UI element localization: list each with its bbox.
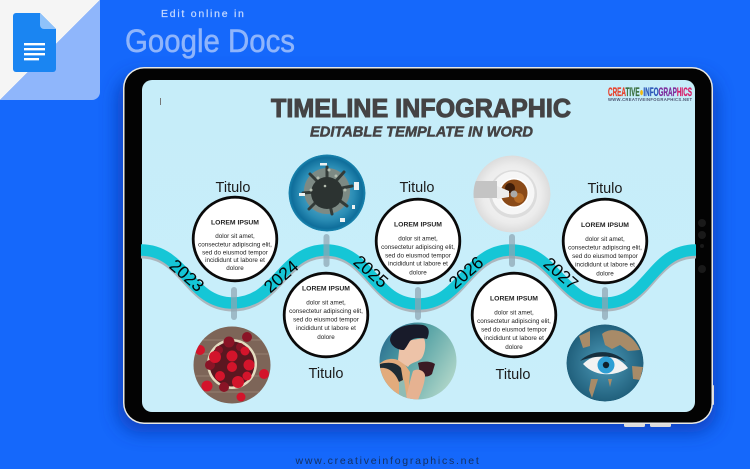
step 2026 text circle: incididunt ut labore et xyxy=(484,335,544,342)
logo: creative infographics: WWW.CREATIVEINFOGRAPHICS.NET xyxy=(608,97,692,102)
step 2027 text circle: incididunt ut labore et xyxy=(575,262,635,268)
step 2024 text circle: incididunt ut labore et xyxy=(296,325,356,332)
step 2024 text circle: dolor sit amet, xyxy=(306,300,346,306)
step 2026 text circle: dolore xyxy=(505,344,523,351)
step 2027 text circle: dolor sit amet, xyxy=(585,236,625,243)
year labels: 2025 xyxy=(350,251,392,292)
wave timeline ribbon xyxy=(141,250,696,307)
step 2023 text circle: consectetur adipiscing elit, xyxy=(198,242,272,248)
photo: eye on earth xyxy=(566,324,644,402)
step 2023 text circle: dolor sit amet, xyxy=(215,233,255,240)
icon: google docs document xyxy=(13,13,56,72)
step headings xyxy=(216,180,622,383)
step headings: Titulo xyxy=(588,181,622,197)
subtitle: EDITABLE TEMPLATE IN WORD xyxy=(310,124,534,140)
step 2026 text circle: sed do eiusmod tempor xyxy=(481,326,547,334)
step 2025 text circle: sed do eiusmod tempor xyxy=(385,252,451,260)
step headings: Titulo xyxy=(496,367,530,383)
step 2027 text circle: LOREM IPSUM xyxy=(581,222,629,229)
title: TIMELINE INFOGRAPHIC xyxy=(271,95,571,123)
step 2025 text circle: dolor sit amet, xyxy=(398,236,438,242)
year labels xyxy=(166,251,582,297)
step 2023 text circle: sed do eiusmod tempor xyxy=(202,250,268,256)
small cursor mark xyxy=(160,98,161,105)
tablet screen xyxy=(142,80,695,412)
step 2023 text circle: incididunt ut labore et xyxy=(205,257,265,264)
photo: woman with cup xyxy=(379,322,457,400)
step 2025 text circle: consectetur adipiscing elit, xyxy=(381,244,455,251)
year labels: 2023 xyxy=(166,255,208,296)
website url: www.creativeinfographics.net xyxy=(295,455,480,467)
step 2025 text circle xyxy=(376,199,460,283)
photo: cherries xyxy=(194,326,270,404)
step 2024 text circle: dolore xyxy=(317,334,335,341)
step 2026 text circle: dolor sit amet, xyxy=(494,310,534,316)
step 2023 text circle: dolore xyxy=(226,265,244,272)
step 2027 text circle xyxy=(563,199,647,283)
photo: dandelion planet xyxy=(288,154,366,232)
tablet xyxy=(118,67,716,432)
step headings: Titulo xyxy=(309,366,343,382)
step 2025 text circle: LOREM IPSUM xyxy=(394,222,442,228)
step 2024 text circle: sed do eiusmod tempor xyxy=(293,316,359,324)
step 2025 text circle: incididunt ut labore et xyxy=(388,260,448,268)
connector bars xyxy=(231,234,608,320)
year labels: 2024 xyxy=(260,256,303,297)
step 2026 text circle: LOREM IPSUM xyxy=(490,296,538,302)
step headings: Titulo xyxy=(400,180,434,196)
google docs wordmark: Google Docs xyxy=(125,23,295,59)
step 2024 text circle: LOREM IPSUM xyxy=(302,286,350,292)
tablet side buttons xyxy=(698,219,706,273)
step 2024 text circle: consectetur adipiscing elit, xyxy=(289,308,363,315)
step headings: Titulo xyxy=(216,180,250,196)
corner badge xyxy=(0,0,100,100)
photo: coffee cup from above xyxy=(473,156,550,232)
step 2027 text circle: sed do eiusmod tempor xyxy=(572,253,638,260)
step 2023 text circle xyxy=(193,197,277,281)
logo: creative infographics: CREATIVE●INFOGRAPHICS xyxy=(608,85,692,99)
step 2023 text circle: LOREM IPSUM xyxy=(211,220,259,226)
step 2027 text circle: dolore xyxy=(596,270,614,278)
step 2026 text circle: consectetur adipiscing elit, xyxy=(477,318,551,325)
step 2024 text circle xyxy=(284,273,368,357)
year labels: 2027 xyxy=(540,253,582,294)
caption: edit online in: Edit online in xyxy=(161,8,246,20)
step 2027 text circle: consectetur adipiscing elit, xyxy=(568,244,642,252)
step 2026 text circle xyxy=(472,273,556,357)
step 2025 text circle: dolore xyxy=(409,270,427,276)
year labels: 2026 xyxy=(445,252,487,293)
